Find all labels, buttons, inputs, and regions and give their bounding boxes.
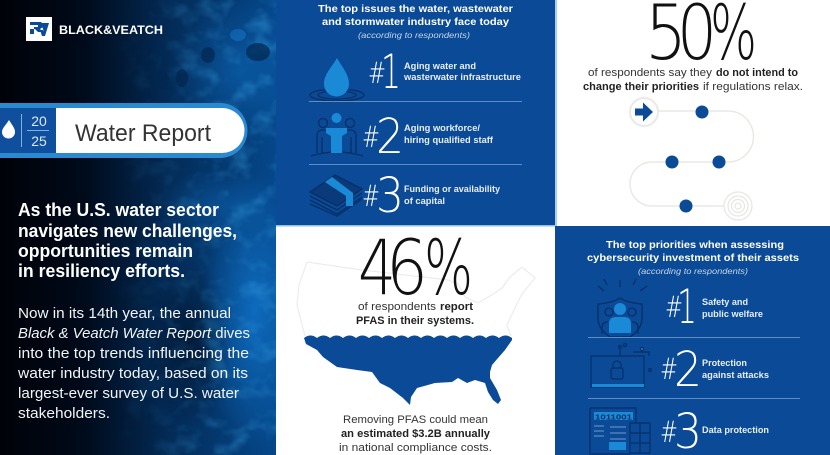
big stat: 46% xyxy=(358,223,473,312)
icon: shield with people xyxy=(598,279,647,337)
rank 1: 1 xyxy=(381,45,401,100)
intro paragraph: Now in its 14th year, the annual xyxy=(18,306,231,322)
icon: laptop with padlock xyxy=(591,344,652,387)
stat description: of respondents say they xyxy=(588,67,713,79)
cost callout: in national compliance costs. xyxy=(339,442,492,454)
issue 3 label: Funding or availability xyxy=(404,184,501,195)
cost callout: an estimated $3.2B annually xyxy=(341,428,491,440)
priority 2 label: against attacks xyxy=(702,370,769,381)
panel: cybersecurity priorities xyxy=(555,226,830,455)
intro paragraph: into the top trends influencing the xyxy=(18,346,249,362)
icon: target xyxy=(724,192,752,220)
heading: top issues xyxy=(318,3,513,40)
big stat: 46%: 4 xyxy=(358,223,396,312)
rank 3: 3 xyxy=(376,168,404,224)
priority 3 label: Data protection xyxy=(702,425,769,436)
priority 2 label xyxy=(702,358,769,381)
cost callout xyxy=(339,414,492,454)
rank 3 xyxy=(660,404,702,455)
banner: 2025 Water Report: 20 xyxy=(31,113,47,129)
icon: data table xyxy=(590,408,650,454)
issue 2 label xyxy=(404,123,494,146)
issue 2 label: Aging workforce/ xyxy=(404,123,480,134)
priority 1 label: public welfare xyxy=(702,309,763,320)
heading: cybersecurity priorities xyxy=(587,239,799,276)
rank 2: 2 xyxy=(376,109,404,165)
rank 1: # xyxy=(368,56,386,90)
rank 2 xyxy=(362,109,404,165)
rank 3 xyxy=(362,168,404,224)
headline: As the U.S. water sector xyxy=(18,200,219,220)
icon: stack of money xyxy=(310,175,362,216)
heading: cybersecurity priorities: cybersecurity investment of their assets xyxy=(587,252,799,264)
icon: arrow xyxy=(635,102,653,122)
stat description: do not intend to xyxy=(716,67,798,79)
icon: water drop xyxy=(2,120,15,138)
heading: cybersecurity priorities: The top priorities when assessing xyxy=(606,239,784,251)
panel: 50 percent xyxy=(555,0,830,226)
heading: top issues: and stormwater industry face today xyxy=(322,16,509,28)
stat description: report xyxy=(440,301,473,313)
rank 1: # xyxy=(665,290,683,324)
headline: navigates new challenges, xyxy=(18,221,237,241)
rank 2 xyxy=(660,342,702,398)
map fill: lower United States xyxy=(304,336,512,405)
intro paragraph: water industry today, based on its xyxy=(17,366,248,382)
stat description: PFAS in their systems. xyxy=(356,315,474,327)
big stat: 46%: 6 xyxy=(386,223,428,312)
heading: cybersecurity priorities: (according to respondents) xyxy=(638,266,748,276)
rank 3: # xyxy=(660,415,678,449)
intro paragraph: stakeholders. xyxy=(18,406,110,422)
priority 2 label: Protection xyxy=(702,358,747,369)
logo: Black & Veatch xyxy=(26,17,163,41)
rank 3: # xyxy=(362,179,380,213)
stat description: if regulations relax. xyxy=(703,81,803,93)
issue 3 label xyxy=(404,184,501,207)
banner: 2025 Water Report xyxy=(0,103,248,158)
intro paragraph: largest-ever survey of U.S. water xyxy=(18,386,239,402)
panel: water photo background xyxy=(0,0,276,455)
rank 2: # xyxy=(660,352,678,386)
headline: in resiliency efforts. xyxy=(18,261,185,281)
icon: data table: 1011001 xyxy=(595,412,632,422)
stat description: of respondents xyxy=(358,301,437,313)
logo: Black & Veatch: BLACK&VEATCH xyxy=(59,23,163,37)
priority 1 label xyxy=(702,297,763,320)
rank 1: 1 xyxy=(677,280,697,335)
heading: top issues: The top issues the water, wastewater xyxy=(318,3,513,15)
map outline: upper United States xyxy=(297,262,535,336)
big stat: 50% xyxy=(645,0,757,77)
issue 1 label: Aging water and xyxy=(404,61,476,72)
stat description: change their priorities xyxy=(583,81,699,93)
panel: 46 percent PFAS xyxy=(276,223,555,455)
rank 1 xyxy=(368,45,401,100)
intro paragraph: Black & Veatch Water Report dives xyxy=(18,326,250,342)
panel: top issues xyxy=(276,0,555,226)
headline: opportunities remain xyxy=(18,241,193,261)
path diagram xyxy=(630,98,754,220)
issue 1 label: wasterwater infrastructure xyxy=(403,72,521,83)
banner: 2025 Water Report: Water Report xyxy=(75,120,211,147)
stat description xyxy=(583,67,803,93)
rank 1 xyxy=(665,280,697,335)
issue 2 label: hiring qualified staff xyxy=(404,135,494,146)
priority 1 label: Safety and xyxy=(702,297,748,308)
heading: top issues: (according to respondents) xyxy=(358,30,470,40)
issue 1 label xyxy=(403,61,521,83)
rank 2: # xyxy=(362,120,380,154)
stat description xyxy=(356,301,474,327)
icon: droplet with ripples xyxy=(310,58,364,101)
banner: 2025 Water Report: 25 xyxy=(31,133,47,149)
rank 2: 2 xyxy=(674,342,702,398)
big stat: 46%: % xyxy=(424,223,473,312)
cost callout: Removing PFAS could mean xyxy=(343,414,488,426)
icon: workforce group xyxy=(311,113,363,156)
intro paragraph xyxy=(17,306,250,422)
headline xyxy=(18,200,237,281)
issue 3 label: of capital xyxy=(404,196,445,207)
